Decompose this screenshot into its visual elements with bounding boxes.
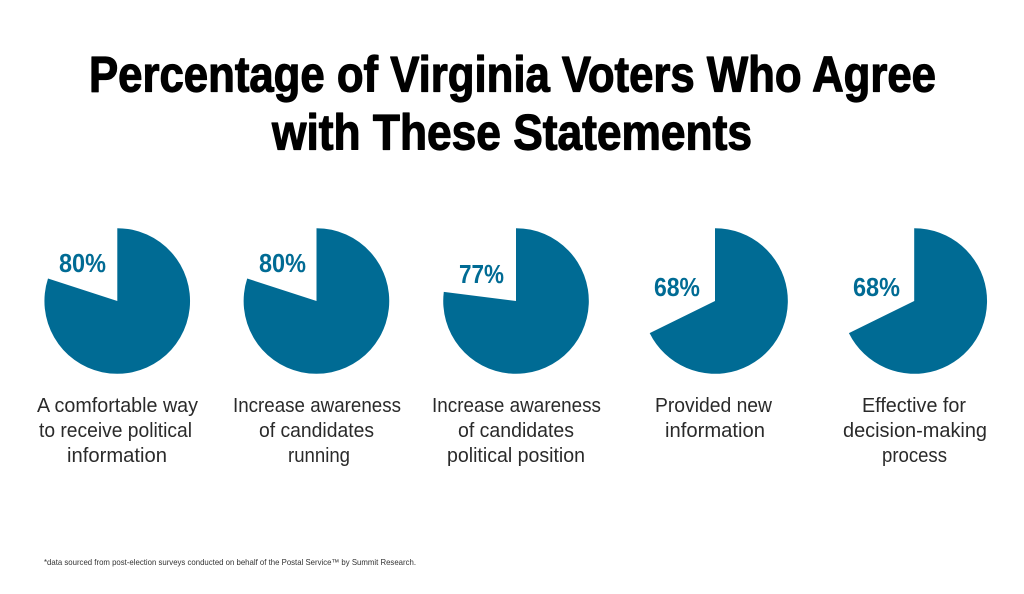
label: A comfortable way [37, 394, 199, 417]
label: political position [447, 444, 585, 467]
label: information [665, 419, 765, 442]
panel: provided new information 68% [650, 228, 788, 442]
label: decision-making [843, 419, 987, 442]
label [432, 394, 601, 467]
label: Increase awareness [432, 394, 601, 417]
pie chart 68% [849, 228, 987, 374]
label: Increase awareness [233, 394, 401, 417]
value 68%: 68% [853, 272, 900, 302]
label: Provided new [655, 394, 772, 417]
label: to receive political [39, 419, 192, 442]
panel: awareness of candidates running 80% [233, 228, 401, 467]
pie chart 77% [443, 228, 589, 374]
pie chart 68% [650, 228, 788, 374]
label: of candidates [259, 419, 374, 442]
label: of candidates [458, 419, 574, 442]
value 68%: 68% [654, 272, 700, 302]
label: running [288, 444, 350, 467]
pie chart 80% [44, 228, 190, 374]
panel: awareness of political position 77% [432, 228, 601, 467]
label: information [67, 444, 167, 467]
label: Effective for [862, 394, 966, 417]
label [37, 394, 199, 467]
pie chart 80% [244, 228, 389, 374]
label: process [882, 444, 947, 467]
label [233, 394, 401, 467]
value 80%: 80% [259, 248, 306, 278]
footnote: *data sourced from post-election surveys conducted on behalf of the Postal Service™ by Summit Research. [44, 557, 416, 567]
title [89, 46, 936, 160]
panel: comfortable way 80% [37, 228, 199, 467]
label [655, 394, 772, 442]
panel: effective for decision-making 68% [843, 228, 987, 467]
value 77%: 77% [459, 259, 504, 289]
label [843, 394, 987, 467]
value 80%: 80% [59, 248, 106, 278]
title: with These Statements [271, 104, 752, 160]
